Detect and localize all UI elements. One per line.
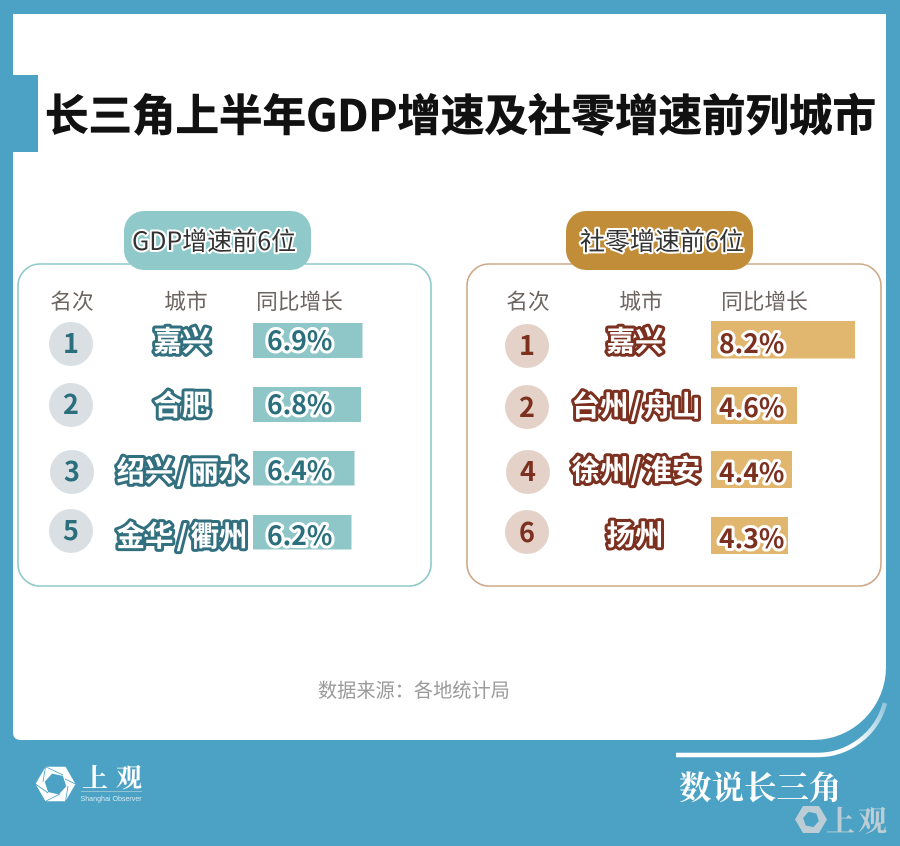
row: 绍兴/丽水 6.4%: 6.4% (267, 449, 332, 488)
row: 徐州/淮安 4.4%: 4.4% (719, 451, 784, 490)
white curved accent line (676, 703, 885, 755)
logo English name: Shanghai Observer (80, 795, 142, 803)
row: 嘉兴 8.2% (505, 319, 855, 368)
row: 徐州/淮安 4.4%: 4 (520, 450, 536, 489)
row: 台州/舟山 4.6%: 2 (519, 386, 535, 425)
panel frame (467, 264, 881, 586)
watermark wordmark: 上观 (826, 799, 890, 840)
series name: 数说长三角 (679, 763, 842, 809)
title tab (13, 75, 38, 152)
row: 台州/舟山 4.6%: 4.6% (719, 386, 784, 425)
row: 绍兴/丽水 6.4%: 绍兴/丽水 (116, 449, 248, 490)
row: 嘉兴 6.9%: 6.9% (267, 319, 332, 358)
row: 绍兴/丽水 6.4% (50, 449, 354, 494)
panel heading pill (566, 211, 753, 270)
row: 合肥 6.8%: 合肥 (153, 383, 211, 424)
column headers: 名次 (506, 285, 550, 316)
row: 嘉兴 8.2%: 嘉兴 (606, 319, 664, 360)
row: 绍兴/丽水 6.4%: 3 (64, 450, 80, 489)
logo wordmark: 上观 (82, 758, 150, 795)
row: 台州/舟山 4.6%: 台州/舟山 (571, 384, 701, 425)
column headers: 城市 (164, 285, 208, 316)
row: 金华/衢州 6.2%: 金华/衢州 (116, 514, 248, 555)
panel heading pill: 社零增速前6位 (580, 222, 744, 258)
row: 嘉兴 6.9%: 嘉兴 (153, 319, 211, 360)
row: 扬州 4.3%: 6 (519, 511, 535, 550)
row: 嘉兴 8.2%: 1 (519, 324, 535, 363)
row: 嘉兴 6.9% (49, 319, 362, 366)
row: 扬州 4.3%: 4.3% (719, 517, 784, 556)
column headers: 同比增长 (721, 285, 808, 316)
row: 徐州/淮安 4.4%: 徐州/淮安 (571, 448, 701, 489)
row: 嘉兴 6.9%: 1 (63, 322, 79, 361)
row: 扬州 4.3% (505, 510, 788, 556)
icon: watermark hexagon (795, 806, 827, 833)
title: 长三角上半年GDP增速及社零增速前列城市 (45, 81, 876, 144)
icon: aperture hexagon (36, 767, 76, 801)
row: 徐州/淮安 4.4% (506, 448, 792, 494)
row: 嘉兴 8.2%: 8.2% (719, 322, 784, 361)
data source note: 数据来源：各地统计局 (318, 675, 510, 703)
logo: Shanghai Observer (36, 758, 150, 803)
column headers: 同比增长 (256, 285, 343, 316)
panel heading pill (124, 211, 311, 270)
row: 合肥 6.8% (49, 383, 361, 427)
panel frame (18, 264, 431, 586)
row: 金华/衢州 6.2%: 6.2% (267, 514, 332, 553)
row: 扬州 4.3%: 扬州 (606, 513, 664, 554)
column headers (50, 285, 343, 316)
panel: retail sales growth top 6 (467, 211, 881, 586)
panel: GDP growth top 6 (18, 211, 431, 586)
row: 金华/衢州 6.2%: 5 (63, 509, 79, 548)
row: 台州/舟山 4.6% (505, 384, 797, 429)
column headers: 城市 (619, 285, 663, 316)
row: 合肥 6.8%: 6.8% (267, 383, 332, 422)
watermark logo (795, 799, 890, 840)
row: 金华/衢州 6.2% (49, 509, 352, 555)
row: 合肥 6.8%: 2 (63, 383, 79, 422)
column headers (506, 285, 808, 316)
panel heading pill: GDP增速前6位 (132, 222, 296, 258)
column headers: 名次 (50, 285, 94, 316)
